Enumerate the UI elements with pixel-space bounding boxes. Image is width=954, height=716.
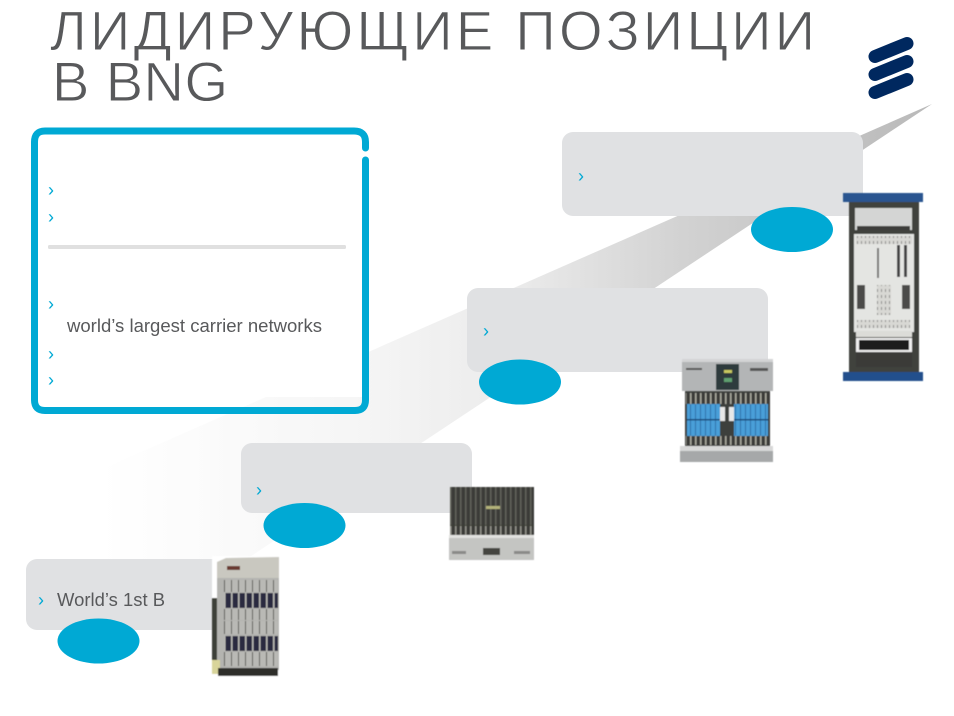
step 1 text: World’s 1st B	[57, 590, 165, 610]
icon: Ericsson logo	[875, 44, 907, 92]
device: router 2	[449, 487, 534, 560]
step 4 box	[562, 132, 863, 216]
step 3 box	[467, 288, 768, 372]
step 1 bullet: ›	[38, 590, 44, 610]
step 2 bullet: ›	[256, 480, 262, 500]
title: В BNG	[52, 50, 228, 113]
step 2 oval	[264, 503, 346, 548]
step 3 oval	[479, 360, 561, 404]
device: router 4	[843, 193, 923, 381]
panel: step 4	[562, 132, 863, 252]
bullets	[48, 180, 54, 390]
title: ЛИДИРУЮЩИЕ ПОЗИЦИИ	[50, 0, 815, 62]
step 2 box	[241, 443, 472, 513]
step 1 oval	[58, 618, 140, 664]
divider	[48, 245, 346, 249]
step 4 oval	[751, 207, 833, 252]
bullets: ›	[48, 294, 54, 314]
card frame	[34, 131, 366, 410]
panel: step 1	[26, 559, 246, 664]
device: router 1	[212, 556, 280, 677]
step 3 bullet: ›	[483, 321, 489, 341]
step 1 box	[26, 559, 246, 630]
bullets: ›	[48, 344, 54, 364]
bullets: ›	[48, 207, 54, 227]
panel: step 3	[467, 288, 768, 404]
panel: step 2	[241, 443, 472, 548]
card white interior	[38, 134, 362, 397]
bullets: ›	[48, 180, 54, 200]
background wedge arrow	[100, 104, 932, 640]
title	[50, 0, 815, 113]
panel: highlights card	[34, 131, 366, 410]
device: router 3	[680, 359, 773, 462]
card text: world’s largest carrier networks	[66, 316, 322, 336]
step 4 bullet: ›	[578, 166, 584, 186]
bullets: ›	[48, 370, 54, 390]
